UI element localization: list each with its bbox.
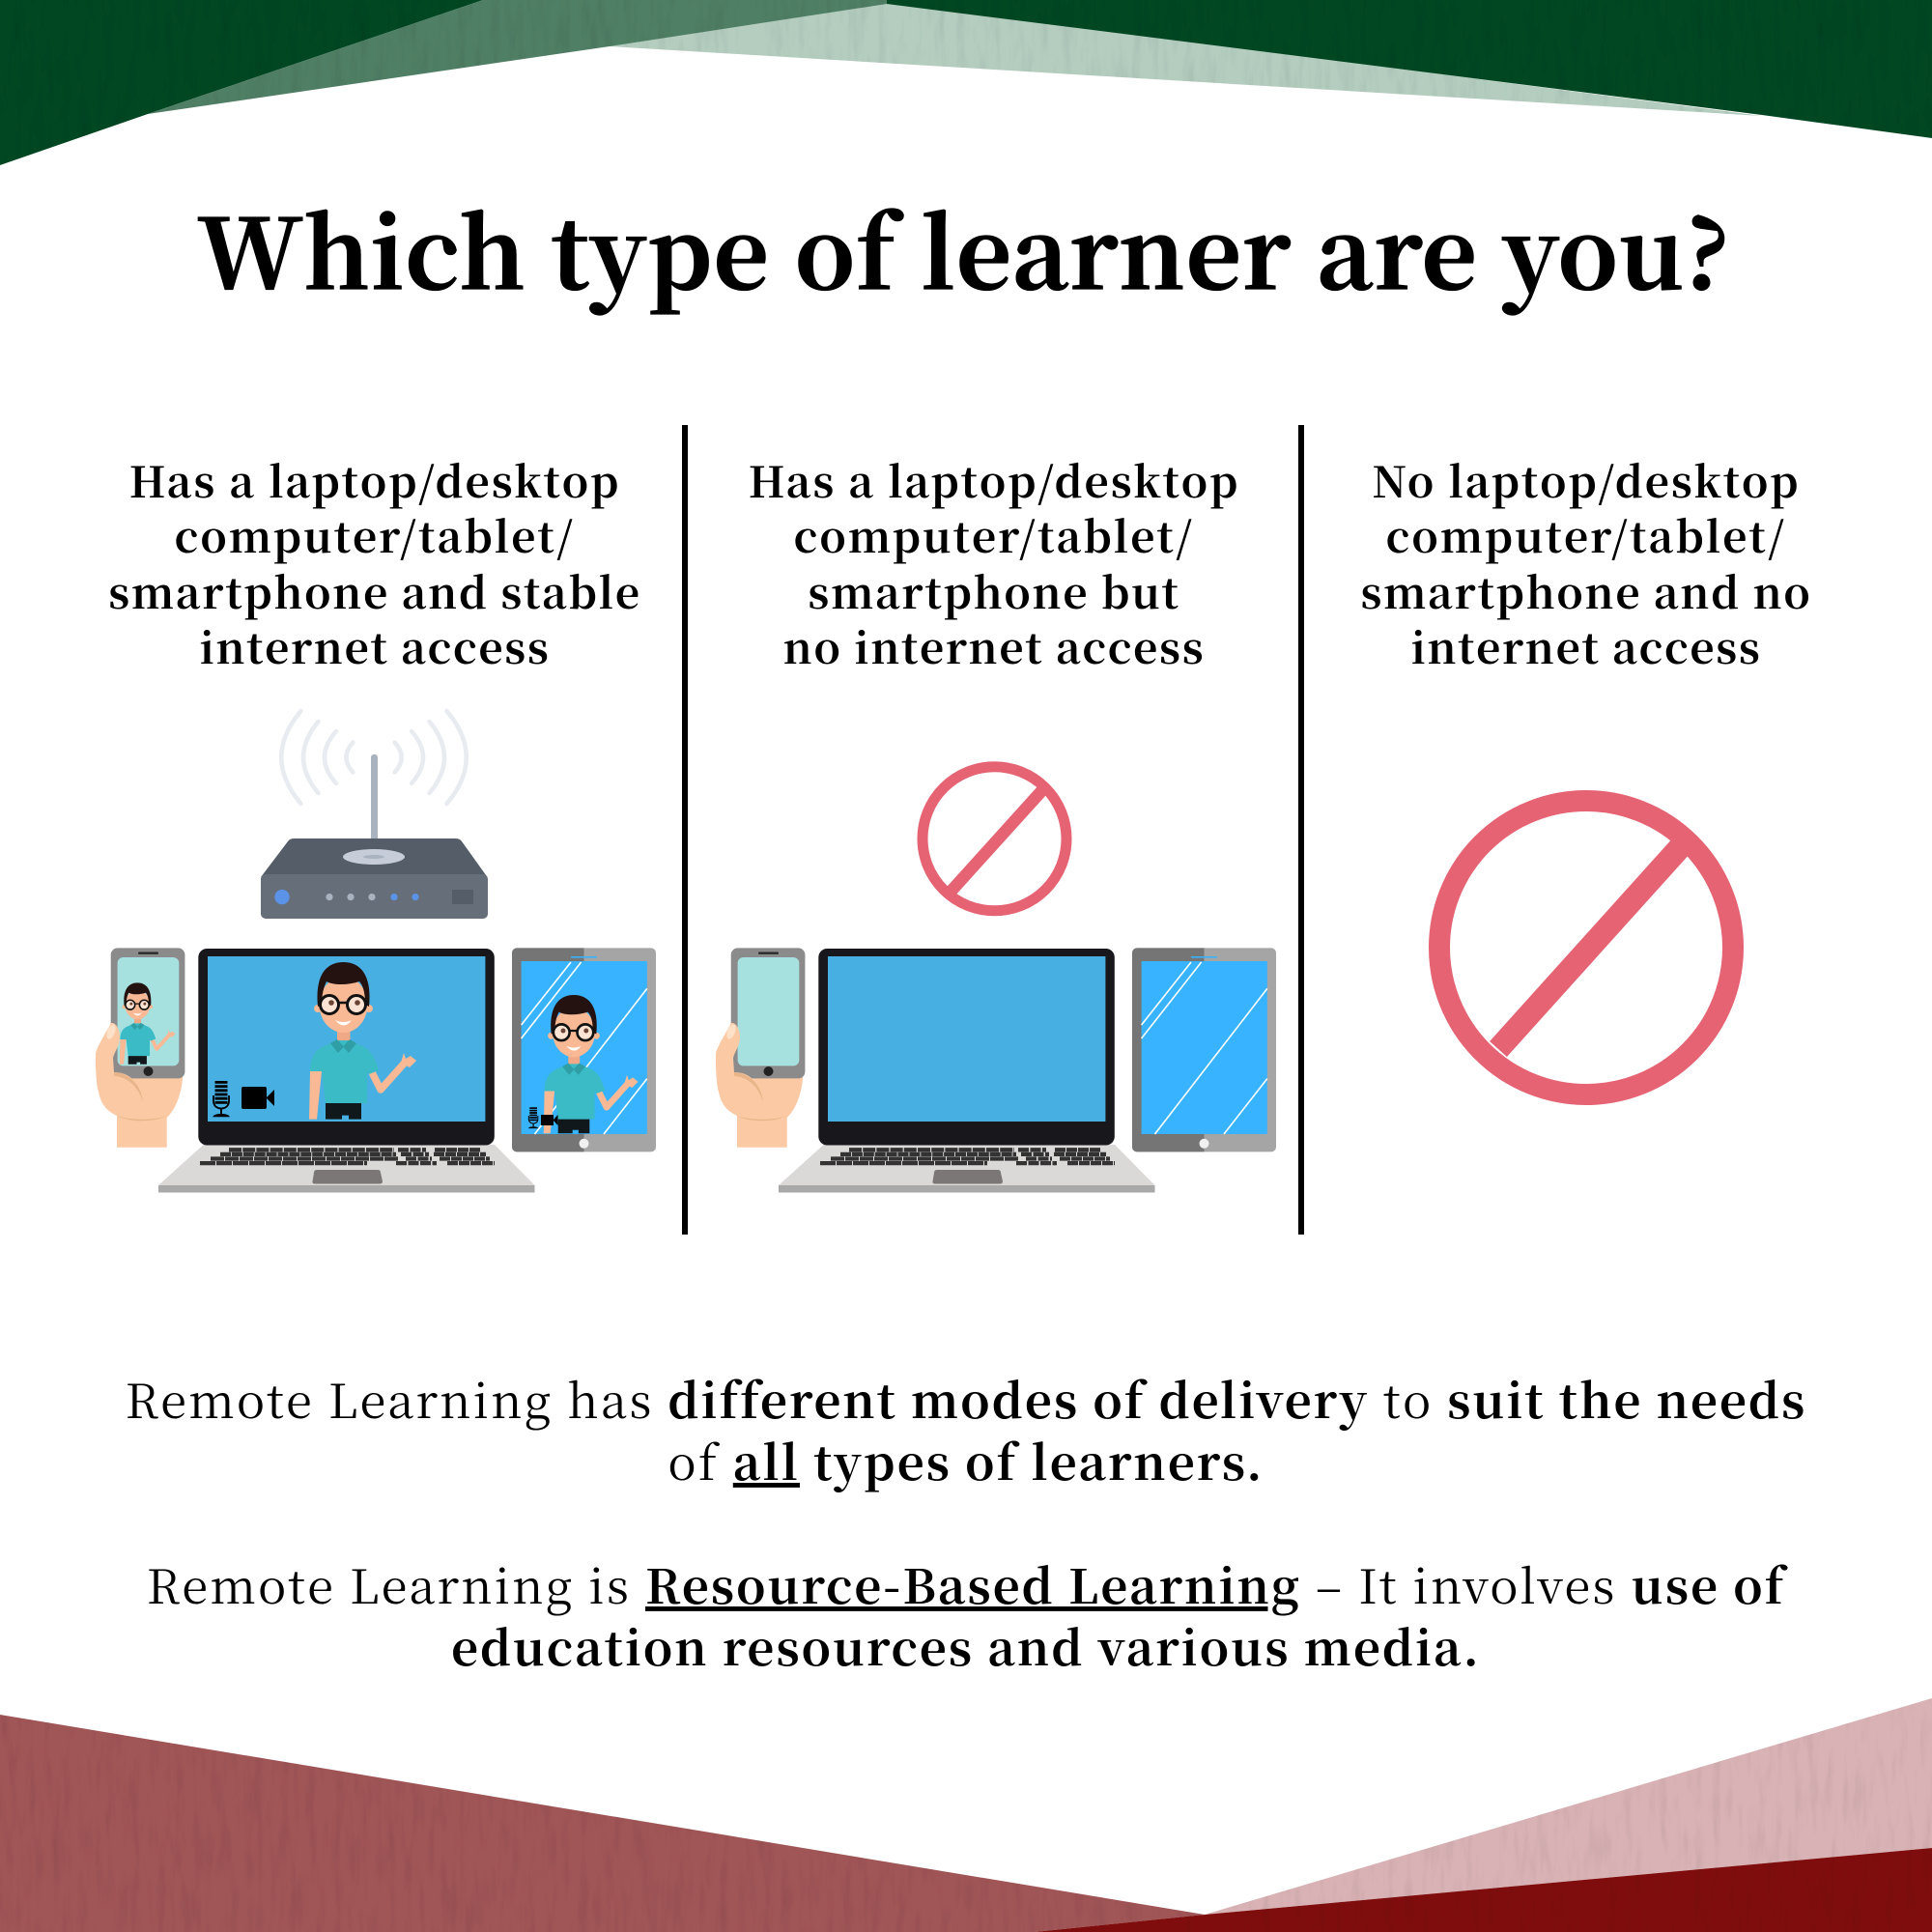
column 1 heading: Has a laptop/desktop xyxy=(129,448,620,510)
devices with video lesson xyxy=(96,948,656,1192)
column 3 heading: internet access xyxy=(1410,614,1762,676)
divider right xyxy=(1298,425,1304,1235)
icon: no device sign xyxy=(1439,801,1733,1094)
column 2 heading: Has a laptop/desktop xyxy=(749,448,1239,510)
icon: microphone xyxy=(213,1081,229,1117)
column 3 heading: smartphone and no xyxy=(1360,559,1812,621)
icon: video camera xyxy=(242,1087,274,1109)
paragraph 2: education resources and various media. xyxy=(451,1611,1481,1679)
icon: no internet sign xyxy=(923,767,1066,911)
devices without connection xyxy=(716,948,1276,1192)
column 2 heading: smartphone but xyxy=(808,559,1180,621)
icon: tablet microphone xyxy=(528,1107,538,1128)
column 2 heading: no internet access xyxy=(783,614,1205,676)
tablet person xyxy=(544,995,639,1133)
column 1 heading: smartphone and stable xyxy=(108,559,641,621)
phone person xyxy=(120,982,175,1065)
column 3 heading: No laptop/desktop xyxy=(1372,448,1801,510)
paragraph 2: Remote Learning is Resource-Based Learning – It involves use of xyxy=(147,1549,1785,1617)
icon: wifi router xyxy=(261,711,488,919)
icon: tablet camera xyxy=(541,1115,558,1125)
paragraph 1: Remote Learning has different modes of delivery to suit the needs xyxy=(126,1364,1806,1432)
column 1 heading: internet access xyxy=(199,614,551,676)
paragraph 1: of all types of learners. xyxy=(668,1426,1264,1493)
laptop person xyxy=(309,962,416,1120)
column 2 heading: computer/tablet/ xyxy=(794,503,1194,565)
column 3 heading: computer/tablet/ xyxy=(1386,503,1786,565)
top banner xyxy=(0,0,1932,165)
column 1 heading: computer/tablet/ xyxy=(175,503,575,565)
title: Which type of learner are you? xyxy=(197,178,1731,317)
bottom banner xyxy=(0,1698,1932,1932)
divider left xyxy=(682,425,688,1235)
